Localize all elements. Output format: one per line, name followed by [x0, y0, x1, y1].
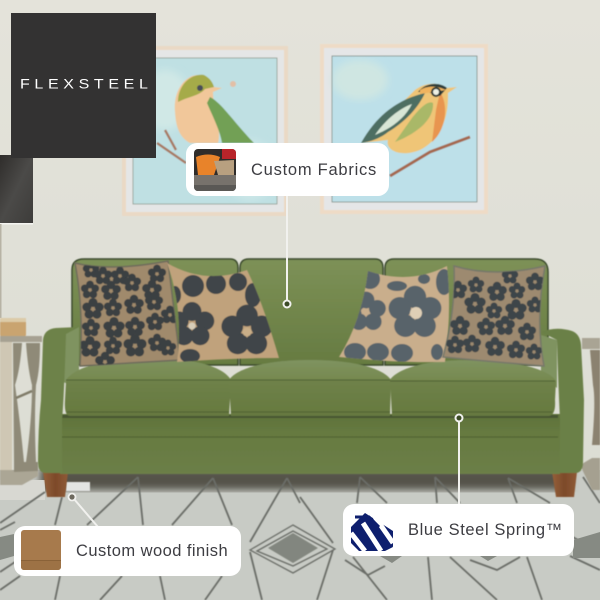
left arm [38, 327, 79, 473]
callout: custom fabrics [186, 143, 389, 196]
label: blue steel spring: Blue Steel Spring™ [408, 521, 563, 539]
table lamp [0, 155, 33, 318]
icon: fabric swatches [194, 149, 236, 191]
framed bird print left [122, 46, 288, 216]
right side table [580, 338, 600, 490]
pillow inner left [167, 263, 279, 363]
sofa legs [43, 472, 577, 497]
label: custom fabrics: Custom Fabrics [251, 161, 377, 179]
left arm inner panel [63, 327, 79, 388]
pillow inner right [339, 266, 452, 362]
base welt [62, 436, 558, 438]
connector: custom wood finish [68, 494, 98, 527]
icon: wood swatch [21, 530, 61, 570]
floor rug [0, 468, 600, 600]
seat cushions [65, 358, 556, 416]
sofa [38, 259, 584, 497]
logo block [11, 13, 156, 158]
left side table [0, 318, 42, 485]
connector: custom fabrics [284, 194, 290, 308]
label: custom wood finish: Custom wood finish [76, 542, 228, 560]
seat cushion center [229, 360, 391, 416]
wall [0, 0, 600, 480]
bird two [361, 84, 470, 176]
icon: blue steel springs [351, 513, 393, 551]
seat cushion right [390, 360, 556, 416]
framed bird print right [320, 44, 488, 214]
callout: custom wood finish [14, 526, 241, 576]
logo wordmark: FLEXSTEEL [20, 77, 153, 92]
seat cushion left [65, 358, 231, 416]
right arm inner panel [541, 335, 557, 388]
pillow far right [443, 266, 545, 366]
connector: blue steel spring [456, 414, 462, 506]
pillow far left [75, 261, 180, 371]
sofa base [60, 414, 560, 474]
bird one [157, 75, 254, 163]
right arm [541, 329, 584, 473]
dark seam under cushions [62, 415, 558, 418]
back cushions [72, 259, 548, 365]
callout: blue steel spring [343, 504, 574, 556]
